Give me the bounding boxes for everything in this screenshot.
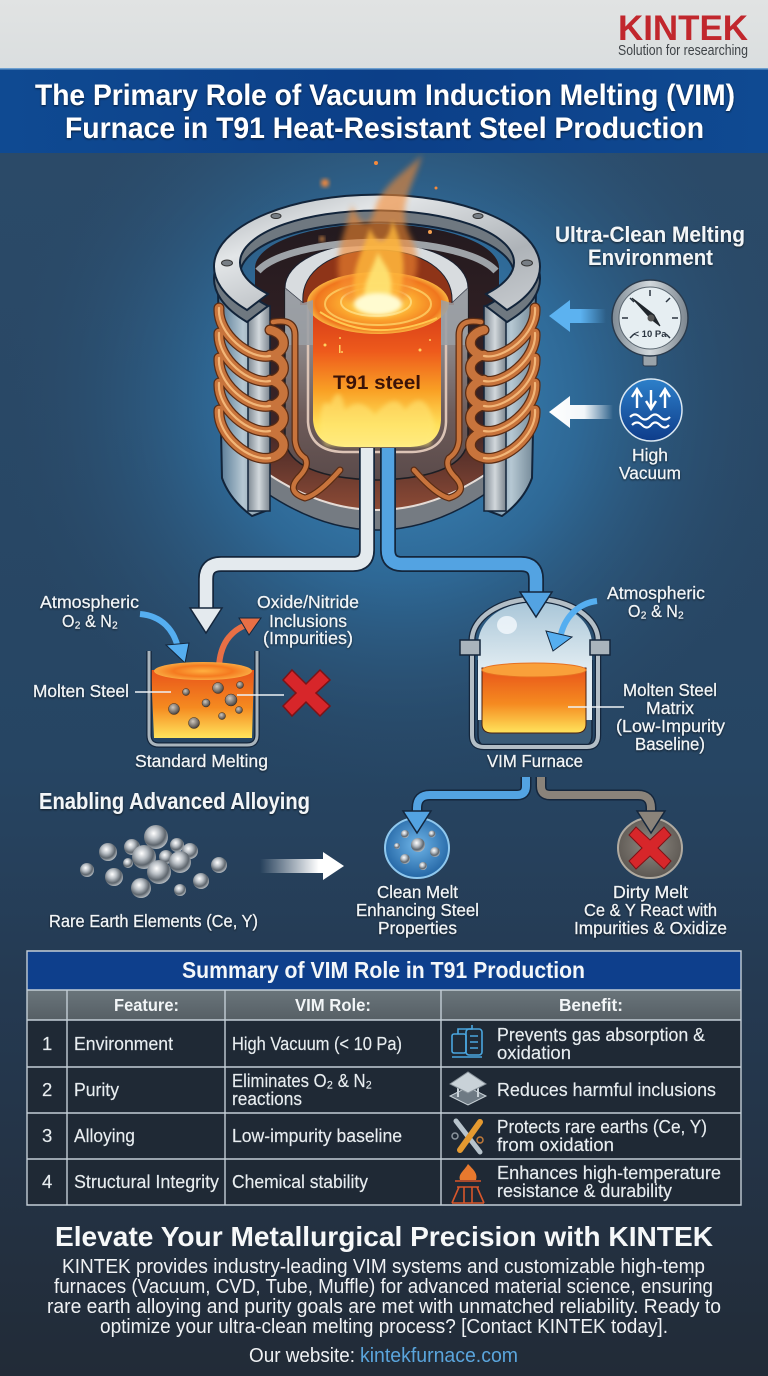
summary table [27,951,741,1205]
label: molten steel matrix: Baseline) [635,734,705,754]
table header row: VIM Role: [295,995,371,1015]
label: dirty melt: Impurities & Oxidize [574,918,727,938]
table row 1: oxidation [497,1042,571,1063]
furnace interior [255,224,499,509]
table row 3: Protects rare earths (Ce, Y) [497,1116,707,1137]
label: clean melt: Properties [378,918,457,938]
arrow: blocked air into VIM vessel [546,601,597,651]
logo bar [0,0,768,68]
label: oxide/nitride inclusions: Oxide/Nitride [257,592,359,612]
label: molten steel: Molten Steel [33,681,129,701]
icon: pressure gauge [612,280,688,366]
table row 2: reactions [232,1088,302,1109]
label: High Vacuum [619,445,681,483]
left coil [219,308,284,458]
label: oxide/nitride inclusions: Inclusions [269,611,347,631]
table row 4 [42,1162,721,1203]
call to action heading: Elevate Your Metallurgical Precision with KINTEK [55,1221,713,1252]
label: molten steel matrix: Molten Steel [623,680,717,700]
top flange ring [214,195,540,322]
label: atmospheric O2 and N2 (left): Atmospheric [40,592,139,612]
icon: vacuum pump [452,1025,482,1057]
label: oxide/nitride inclusions: (Impurities) [263,628,353,648]
label: molten steel [33,681,284,701]
label: oxide/nitride inclusions [257,592,359,648]
right coil [470,308,535,458]
icon: steel plates [450,1072,486,1105]
table row 1: High Vacuum (< 10 Pa) [232,1033,402,1054]
icon: rare earth spheres [80,825,227,898]
label: dirty melt: Ce & Y React with [584,900,717,920]
icon: red X [283,670,330,716]
label: clean melt: Clean Melt [377,882,458,902]
table row 3: Low-impurity baseline [232,1125,402,1146]
label: clean melt: Enhancing Steel [356,900,479,920]
molten steel [313,300,441,447]
crucible shell [285,290,468,480]
heading: Ultra-Clean Melting Environment: Environment [588,245,714,270]
label: rare earth elements: Rare Earth Elements (Ce, Y) [49,911,258,931]
table header row: Benefit: [559,995,623,1015]
call to action paragraph: KINTEK provides industry-leading VIM systems and customizable high-temp [62,1256,705,1278]
branch arrow: dirty melt [541,777,651,816]
arrow: high vacuum to furnace [549,396,613,428]
title: Furnace in T91 Heat-Resistant Steel Production [65,112,704,145]
title: The Primary Role of Vacuum Induction Melting (VIM) [35,79,735,112]
label: High Vacuum: High [632,445,668,465]
website line: Our website: [249,1345,355,1367]
coil leads [273,321,481,498]
table title [27,951,741,990]
VIM vessel [460,599,610,747]
table row 2: Eliminates O₂ & N₂ [232,1070,372,1091]
logo: KINTEK: KINTEK [618,9,748,48]
table row 1: Prevents gas absorption & [497,1024,706,1045]
inclusions [168,682,244,728]
table row 1: Environment [74,1033,173,1054]
icon: crossed tools [452,1121,483,1152]
call to action paragraph: furnaces (Vacuum, CVD, Tube, Muffle) for advanced material science, ensuring [54,1276,713,1298]
icon: clean melt sphere [385,811,449,878]
crucible rim [285,243,468,345]
molten surface [307,272,449,334]
table row 3 [42,1116,707,1155]
melt flame tongues [320,394,435,446]
crucible inner line [308,304,446,452]
label: dirty melt [574,882,727,938]
table header row: Feature: [114,995,179,1015]
table header row [27,990,741,1020]
standard melting beaker [149,651,257,745]
table row 4: Chemical stability [232,1171,369,1192]
label: dirty melt: Dirty Melt [613,882,688,902]
label: atmospheric O2 and N2 (right): Atmospheric [607,583,705,603]
label: atmospheric O2 and N2 (right) [607,583,705,621]
furnace base ring [265,472,488,530]
table row 2: Reduces harmful inclusions [497,1079,716,1100]
title [35,79,735,145]
icon: pressure gauge: < 10 Pa [633,329,667,340]
call to action paragraph [47,1256,721,1338]
arrow: impurities rising [219,618,261,674]
heading: Ultra-Clean Melting Environment: Ultra-Clean Melting [555,222,745,247]
call to action paragraph: rare earth alloying and purity goals are met with unmatched reliability. Ready to [47,1296,721,1318]
arrow: rare earths to melt [260,852,344,880]
heading: Ultra-Clean Melting Environment [555,222,745,270]
table row 2 [42,1070,716,1109]
label: High Vacuum: Vacuum [619,463,681,483]
flames [320,155,438,315]
support posts [248,306,506,511]
call to action paragraph: optimize your ultra-clean melting process? [Contact KINTEK today]. [100,1316,668,1338]
table row 4: 4 [42,1171,52,1192]
icon: furnace flame [452,1164,484,1203]
label: standard melting: Standard Melting [135,751,268,771]
table row 4: resistance & durability [497,1180,673,1201]
table row 4: Structural Integrity [74,1171,220,1192]
sparks [324,337,431,353]
branch arrow: clean melt [417,777,526,816]
label: atmospheric O2 and N2 (left): O₂ & N₂ [62,611,118,631]
website line [249,1345,518,1367]
label: T91 steel: T91 steel [333,372,421,394]
table row 2: 2 [42,1079,52,1100]
table row 1 [42,1024,706,1063]
heading: enabling advanced alloying: Enabling Advanced Alloying [39,788,310,814]
flow pipe: to VIM furnace [388,448,552,617]
label: molten steel matrix: Matrix [646,698,694,718]
table row 1: 1 [42,1033,52,1054]
flow pipe: to standard melting [190,448,367,633]
crucible back wall [300,250,454,305]
arrow: air into standard melt [140,614,189,663]
table row 4: Enhances high-temperature [497,1162,721,1183]
label: VIM furnace: VIM Furnace [487,751,583,771]
icon: high vacuum [620,379,682,441]
label: clean melt [356,882,479,938]
table row 2: Purity [74,1079,120,1100]
icon: dirty melt sphere [618,811,682,878]
arrow: vacuum gauge to furnace [549,300,606,332]
table row 3: Alloying [74,1125,135,1146]
title banner [0,68,768,153]
website line: kintekfurnace.com [360,1345,518,1367]
table row 3: from oxidation [497,1134,614,1155]
furnace illustration [214,155,540,530]
label: atmospheric O2 and N2 (left) [40,592,139,631]
table title: Summary of VIM Role in T91 Production [182,957,585,983]
table row 3: 3 [42,1125,52,1146]
logo: KINTEK: Solution for researching [618,43,748,59]
label: molten steel matrix: (Low-Impurity [616,716,725,736]
label: molten steel matrix [568,680,725,754]
furnace outer wall [218,290,536,516]
label: atmospheric O2 and N2 (right): O₂ & N₂ [628,601,684,621]
